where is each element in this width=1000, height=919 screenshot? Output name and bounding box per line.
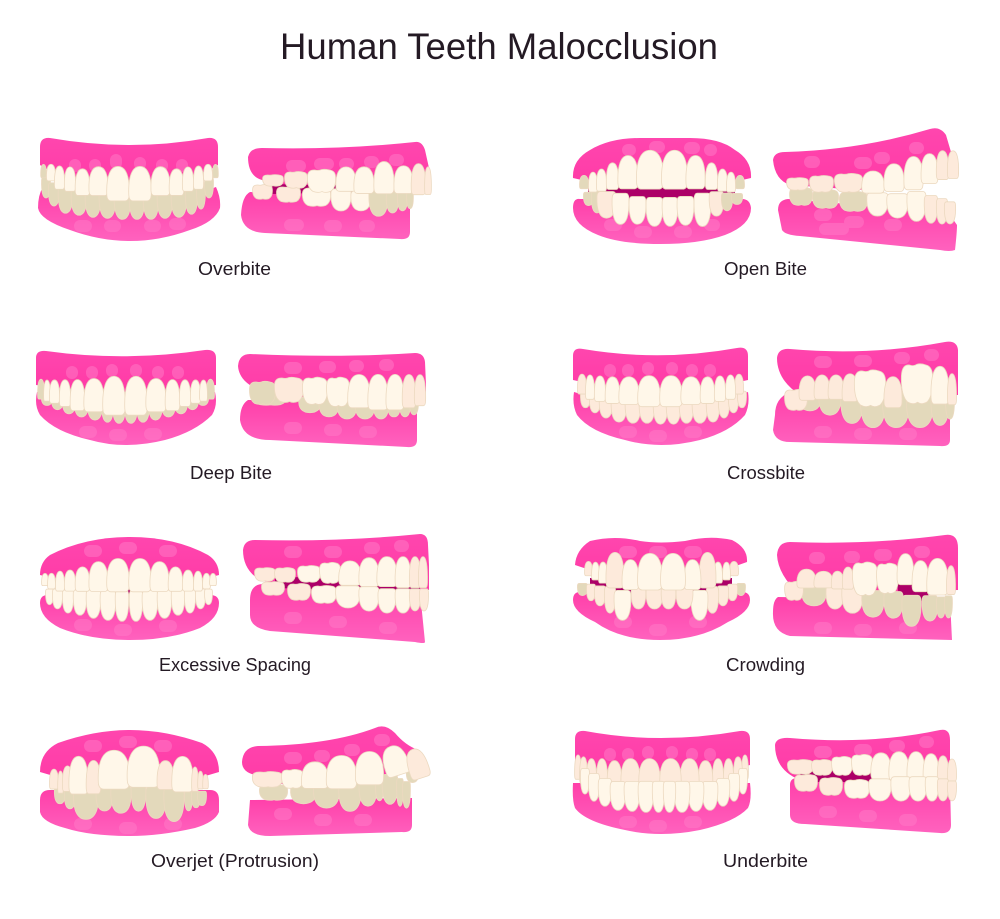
lower teeth [54,784,207,822]
gum highlights [620,552,701,630]
deep bite side view [238,353,426,447]
crowding front view [573,538,750,640]
mouth interior [355,768,362,782]
upper teeth [579,150,745,192]
lower teeth [795,774,957,801]
mouth interior [272,184,365,194]
panel: crowding [573,535,958,675]
panel: overbite [38,138,431,279]
lower gum [241,192,410,239]
upper gum [575,731,750,778]
upper teeth [787,151,959,193]
upper gum [573,348,748,390]
gum highlights [815,552,924,630]
lower gum [38,187,220,241]
upper teeth [585,552,739,590]
label: Overjet (Protrusion) [151,851,319,871]
upper teeth [255,557,428,588]
lower teeth [254,395,419,419]
mouth interior [800,770,930,782]
lower gum [240,400,417,447]
upper teeth [577,374,744,407]
crossbite side view [773,342,958,446]
lower teeth [259,769,419,811]
upper gum [777,535,958,595]
upper gum [243,534,429,590]
label: Excessive Spacing [159,655,311,675]
gum highlights [80,548,171,630]
panel: crossbite [573,342,958,483]
gum highlights [75,160,182,226]
mouth interior [60,586,200,594]
lower teeth [262,582,429,613]
lower gum [778,199,957,251]
lower gum [790,778,951,833]
upper teeth [263,162,431,195]
mouth interior [167,783,193,793]
lower gum [773,597,952,640]
title: Human Teeth Malocclusion [280,26,718,67]
gum highlights [610,752,710,826]
upper teeth [249,374,426,410]
gum highlights [610,368,710,436]
upper gum [40,537,219,588]
gum highlights [72,370,178,435]
upper gum [238,353,426,400]
mouth interior [56,183,204,200]
lower gum [573,199,751,244]
lower gum [573,392,749,445]
upper teeth [38,376,214,415]
lower teeth [790,187,956,224]
label: Underbite [723,851,808,871]
excessive spacing side view [243,534,429,643]
lower gum [773,392,950,446]
upper teeth [49,746,208,794]
deep bite front view [36,350,216,445]
mouth interior [275,576,420,592]
panel: underbite [573,730,957,871]
gum highlights [80,742,176,828]
lower teeth [46,589,212,621]
lower gum [40,595,219,640]
lower teeth [577,583,746,620]
panel: deep bite [36,350,426,483]
lower gum [40,790,219,836]
label: Crossbite [727,463,805,483]
gum highlights [810,148,918,229]
label: Open Bite [724,259,807,279]
upper gum [777,342,958,395]
lower gum [250,584,425,643]
upper gum [573,138,751,189]
excessive spacing front view [40,537,219,640]
upper teeth [42,558,216,592]
gum highlights [290,365,388,432]
lower teeth [583,191,743,226]
panel: open bite [573,128,959,279]
lower teeth [799,389,955,428]
lower teeth [802,586,952,626]
underbite side view [775,730,957,833]
mouth interior [897,583,930,603]
lower gum [573,783,751,834]
mouth interior [590,578,732,598]
panel: excessive spacing [40,534,429,675]
panel: overjet [40,726,431,871]
gum highlights [820,355,933,434]
lower teeth [41,177,214,219]
upper gum [40,730,219,786]
crowding side view [773,535,958,640]
upper gum [40,138,218,190]
gum highlights [290,160,398,226]
upper gum [775,730,950,780]
mouth interior [588,186,735,200]
upper teeth [41,164,218,201]
upper gum [36,350,216,392]
upper teeth [787,752,957,783]
upper gum [773,128,951,190]
lower gum [36,392,216,445]
label: Deep Bite [190,463,272,483]
gum highlights [610,147,714,232]
label: Overbite [198,259,271,279]
crossbite front view [573,348,749,445]
upper gum [242,726,418,790]
lower gum [248,798,412,836]
open bite side view [773,128,959,251]
upper teeth [785,364,957,410]
gum highlights [280,740,384,820]
lower teeth [580,391,747,424]
lower gum [573,592,750,640]
underbite front view [573,731,751,834]
upper teeth [785,554,956,600]
upper gum [248,142,429,195]
overjet side view [242,726,431,836]
gum highlights [290,546,403,628]
upper teeth [575,755,748,790]
label: Crowding [726,655,805,675]
overbite side view [241,142,431,239]
open bite front view [573,138,751,244]
lower teeth [580,769,748,812]
upper teeth [252,743,431,789]
overjet front view [40,730,219,836]
upper gum [575,538,747,579]
overbite front view [38,138,220,241]
lower teeth [41,394,209,423]
gum highlights [820,742,928,820]
lower teeth [253,185,413,216]
